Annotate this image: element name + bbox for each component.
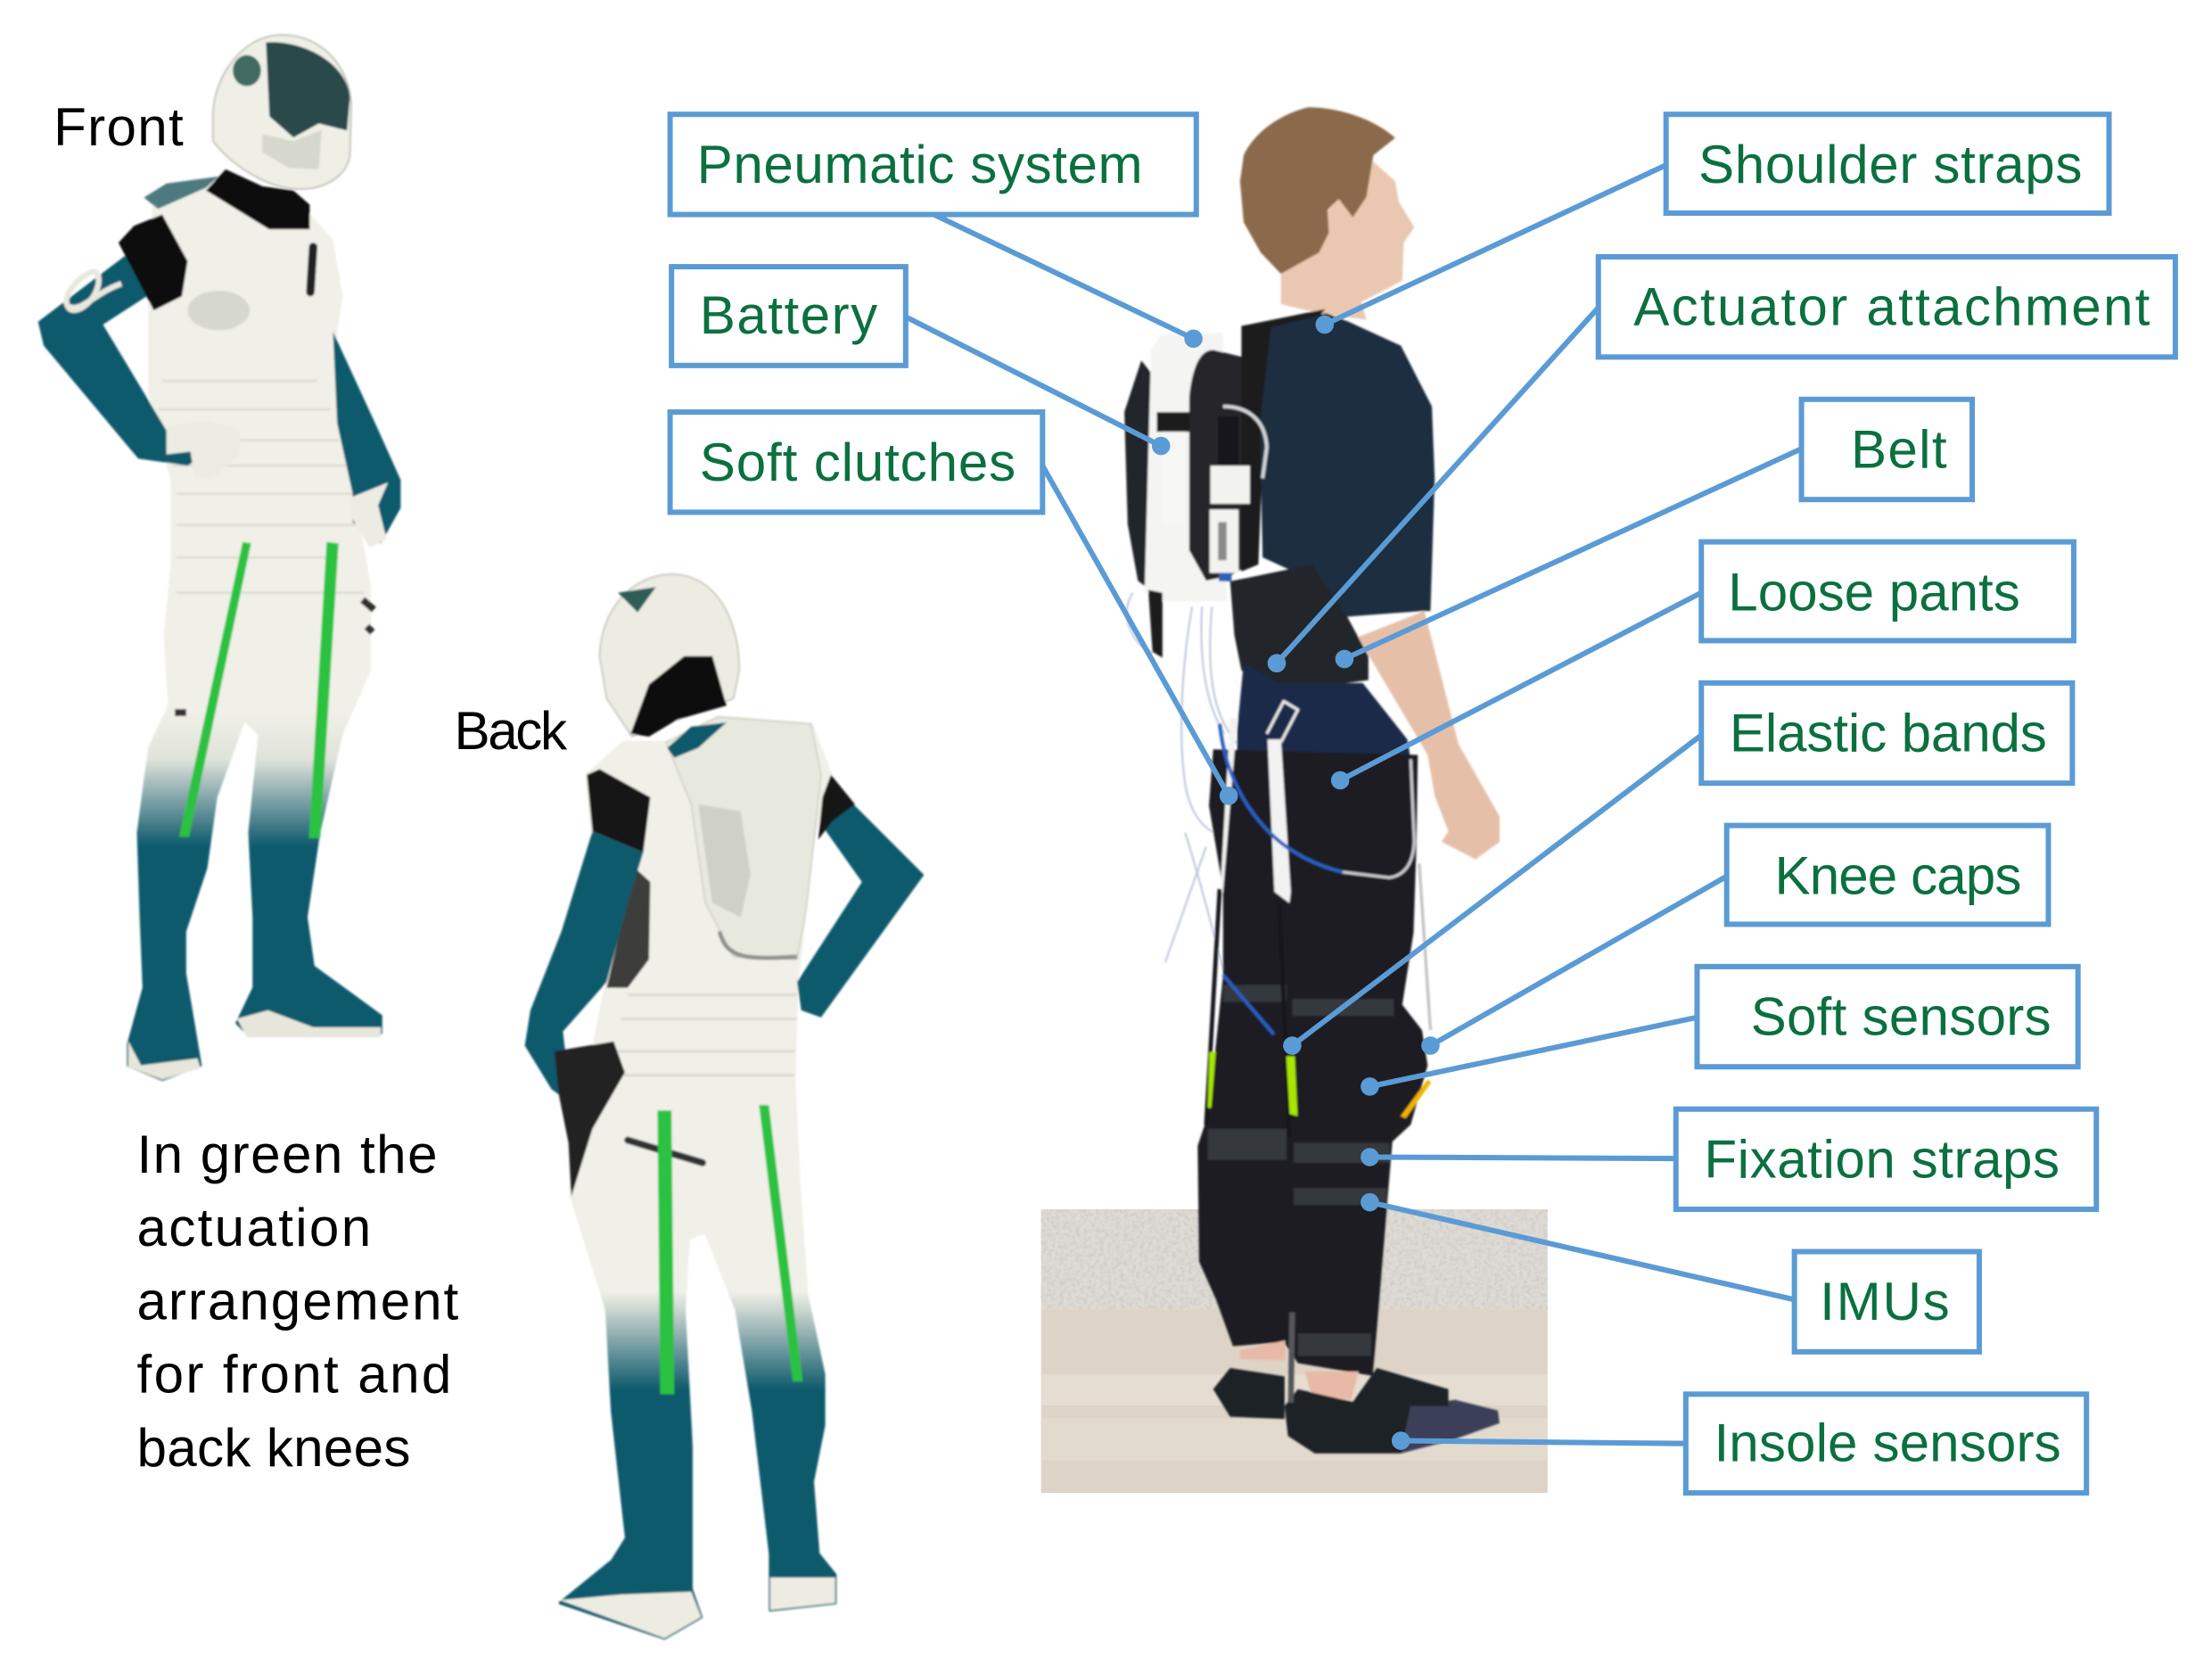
- rods: [1206, 889, 1289, 1137]
- knee cap yellow edge: [1401, 1079, 1431, 1118]
- silver tube: [1343, 759, 1414, 878]
- waist harness: [1230, 565, 1369, 691]
- arm left: [38, 251, 210, 466]
- callout: Pneumatic system: Pneumatic system: [697, 135, 1143, 194]
- soft sensor rear: [1208, 1052, 1216, 1108]
- sleeve right: [818, 775, 855, 839]
- side panel: [606, 868, 650, 988]
- shoe rear: [1213, 1368, 1285, 1419]
- shoulder strap: [1241, 309, 1326, 572]
- knee actuator cable: [1419, 863, 1430, 1030]
- hip marks: [175, 599, 374, 713]
- callout: Actuator attachment: Actuator attachment: [1633, 277, 2150, 337]
- hip bar: [628, 1141, 703, 1163]
- backpack black panel: [1189, 350, 1257, 581]
- neck: [206, 169, 309, 229]
- callout: Belt: Belt: [1851, 420, 1947, 480]
- backpack shading: [698, 804, 751, 918]
- shoulder trim: [144, 177, 218, 209]
- actuator line back right: [759, 1105, 802, 1381]
- callout: Battery: [671, 267, 1170, 455]
- shoe front: [1401, 1400, 1500, 1454]
- callout: IMUs: IMUs: [1820, 1272, 1950, 1331]
- callout: Elastic bands: Elastic bands: [1730, 704, 2047, 763]
- backpack hanging strap: [1148, 589, 1163, 657]
- arm left: [525, 831, 644, 1103]
- bare arm: [1358, 611, 1500, 860]
- callout: Soft sensors: [1361, 967, 2078, 1096]
- backpack cross strap: [1156, 412, 1221, 432]
- battery: [1162, 432, 1186, 525]
- callout: Loose pants: Loose pants: [1728, 562, 2020, 622]
- caption: actuation arrangement: back knees: [136, 1418, 410, 1478]
- helmet details: [233, 55, 261, 87]
- callout: Battery: Battery: [700, 285, 877, 345]
- callout: Belt: [1336, 400, 1972, 668]
- callout: Fixation straps: [1361, 1109, 2096, 1209]
- callout: Actuator attachment: [1268, 257, 2175, 672]
- callout: Soft sensors: Soft sensors: [1751, 987, 2052, 1047]
- callout: Insole sensors: [1392, 1394, 2086, 1493]
- callout: Fixation straps: Fixation straps: [1704, 1129, 2060, 1189]
- callout: Shoulder straps: [1315, 114, 2109, 334]
- pants: [1197, 749, 1427, 1376]
- sweater upper: [1260, 313, 1435, 616]
- arm right: [797, 789, 924, 1018]
- shoulder patch: [667, 722, 727, 758]
- torso shading: [158, 291, 364, 593]
- caption: actuation arrangement: In green the: [136, 1125, 438, 1184]
- callout: IMUs: [1361, 1193, 1979, 1352]
- soft sensor front: [1287, 1057, 1297, 1117]
- loop at strap: [1267, 701, 1298, 742]
- neck: [630, 656, 727, 737]
- callout: Insole sensors: Insole sensors: [1714, 1413, 2061, 1472]
- figure: front view of exosuit avatar: [38, 35, 400, 1079]
- sweater hem: [1238, 663, 1410, 765]
- helmet emblem: [618, 587, 656, 613]
- helmet: [213, 35, 351, 189]
- actuator line front left: [179, 542, 251, 836]
- backpack white shell: [1145, 333, 1227, 601]
- backpack side pocket: [1124, 360, 1162, 591]
- figure: back view of exosuit avatar: [525, 574, 924, 1638]
- caption: actuation arrangement: for front and: [136, 1345, 451, 1405]
- blue tube: [1220, 724, 1343, 872]
- caption: actuation arrangement: arrangement: [136, 1271, 459, 1331]
- arm right: [333, 332, 400, 543]
- knee bands: [1207, 985, 1394, 1356]
- white elastic strap: [1268, 739, 1291, 903]
- pump: [1210, 407, 1267, 581]
- photo background: floor and wall: [1041, 1209, 1548, 1493]
- sleeve left: [119, 215, 187, 310]
- callout: Elastic bands: [1283, 683, 2072, 1055]
- ankle skin: [1240, 1340, 1359, 1400]
- label: Back: Back: [454, 701, 568, 761]
- caption: actuation arrangement: [136, 1125, 459, 1478]
- photo: man wearing exosuit: [1124, 107, 1500, 1454]
- callout: Knee caps: Knee caps: [1774, 845, 2021, 905]
- hair: [1240, 107, 1395, 274]
- helmet: [599, 574, 739, 737]
- hand and holster: [555, 1042, 625, 1197]
- knee tube: [1223, 975, 1274, 1034]
- arm symbol: [67, 272, 121, 310]
- left white strap: [1221, 718, 1238, 892]
- callout: Shoulder straps: Shoulder straps: [1698, 135, 2082, 194]
- backpack shell: [666, 717, 821, 960]
- callout: Soft clutches: [670, 412, 1238, 805]
- hand left: [167, 421, 240, 480]
- body suit fading to teal legs: [560, 717, 835, 1638]
- visor: [266, 42, 349, 137]
- callout: Knee caps: [1421, 826, 2048, 1055]
- shoe soles: [237, 1010, 381, 1037]
- shoe soles: [560, 1592, 701, 1638]
- label: Front: Front: [53, 97, 184, 157]
- actuator line front right: [309, 542, 339, 838]
- chest slit: [310, 247, 313, 293]
- shoe strap: [1285, 1368, 1449, 1454]
- sleeve left: [587, 769, 650, 853]
- hand right: [353, 482, 388, 548]
- face and neck: [1281, 155, 1414, 319]
- callout: Pneumatic system: [670, 114, 1203, 348]
- caption: actuation arrangement: actuation: [136, 1198, 371, 1257]
- callout: Soft clutches: Soft clutches: [700, 433, 1016, 492]
- callout: Loose pants: [1331, 542, 2074, 789]
- body suit fading to teal legs: [128, 181, 381, 1079]
- actuator line back left: [657, 1110, 674, 1394]
- waist ribs: [610, 995, 797, 1076]
- thin cables: [1127, 593, 1241, 974]
